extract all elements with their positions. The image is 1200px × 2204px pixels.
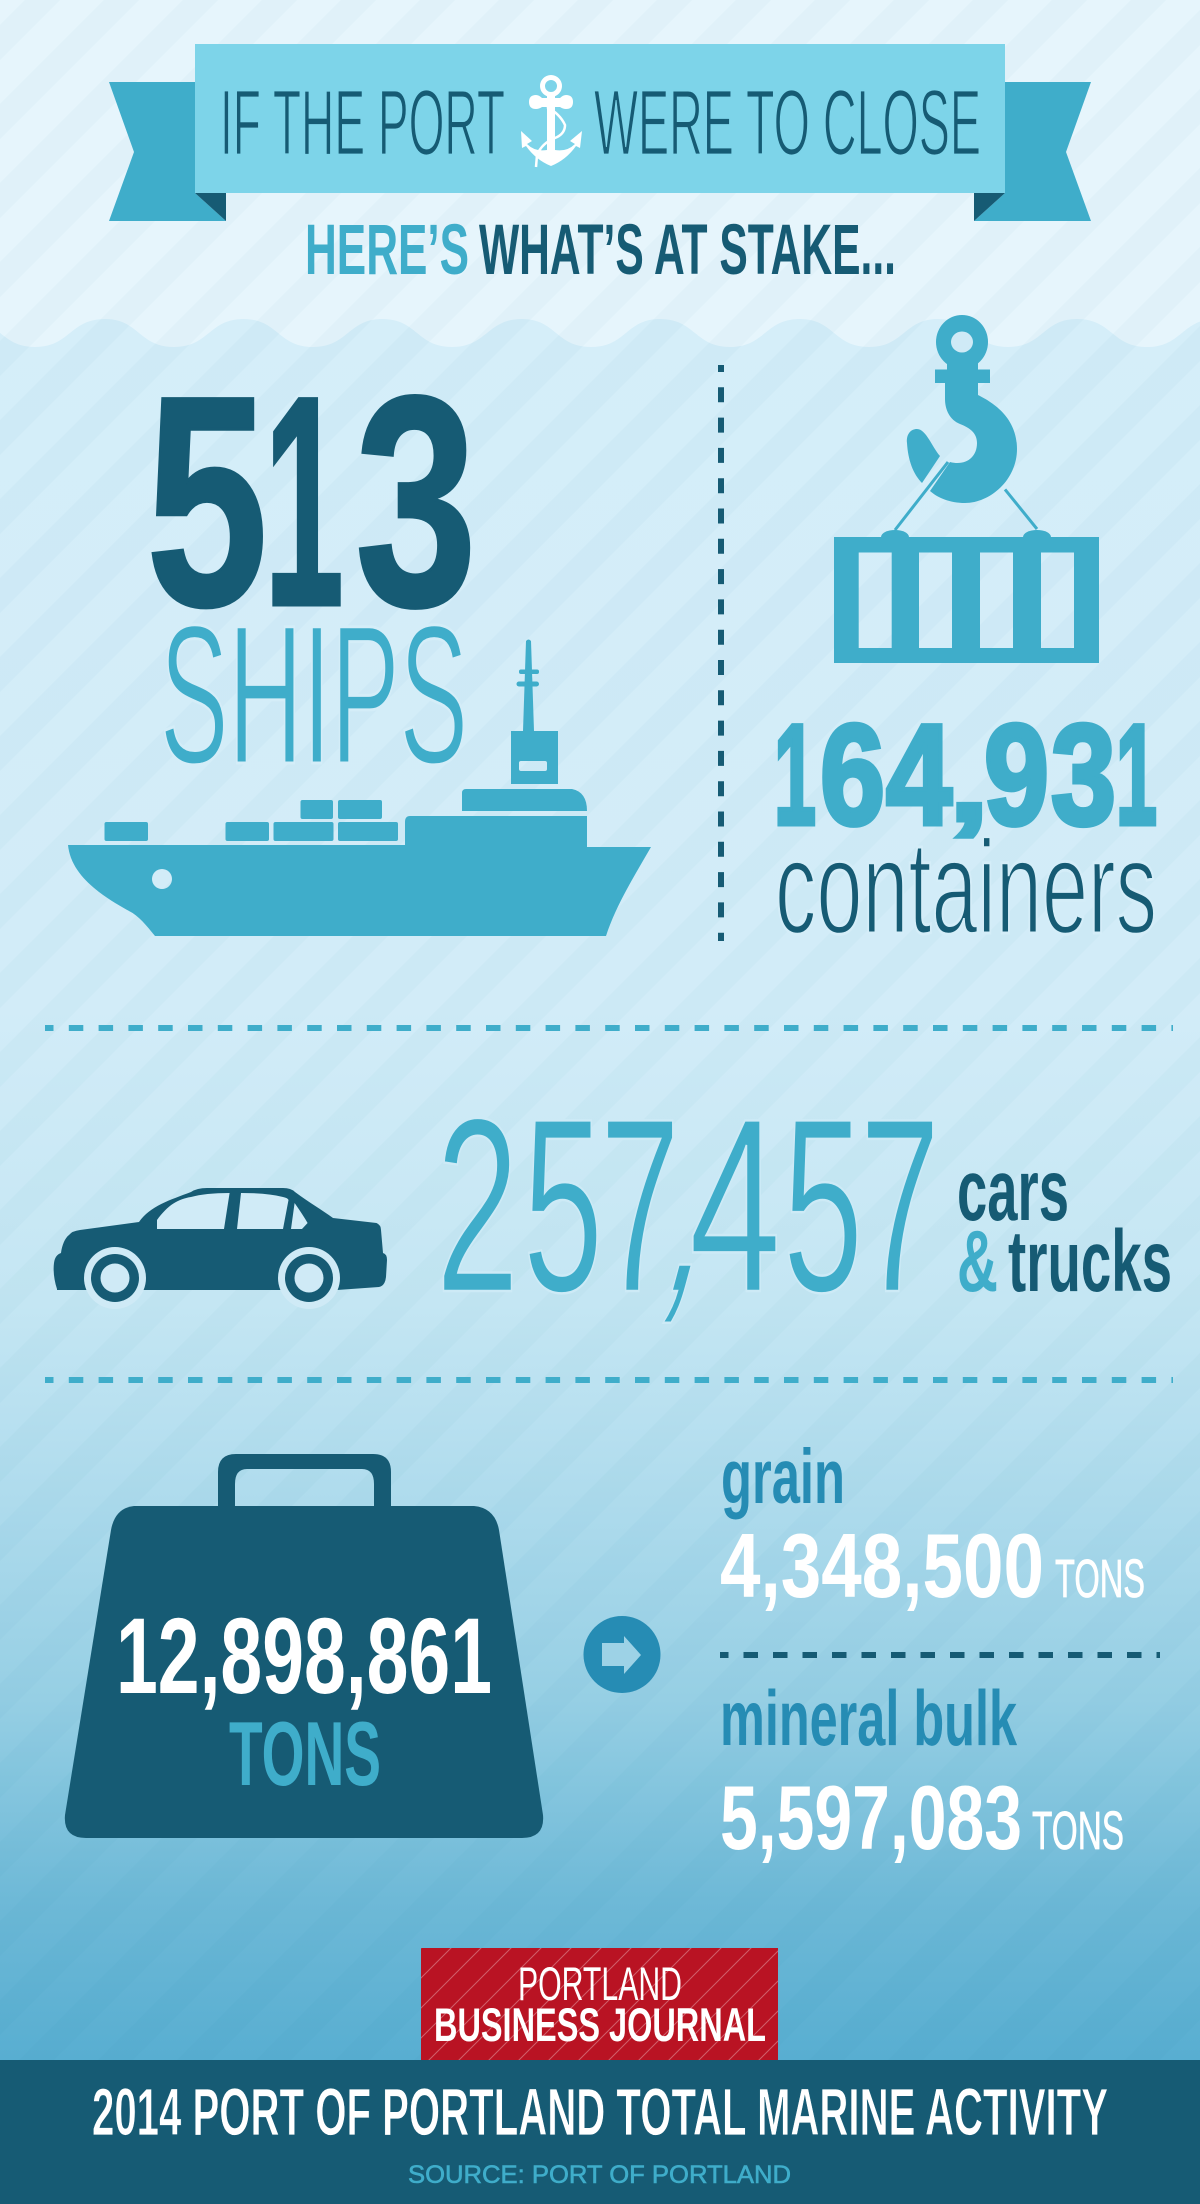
stat: 257,457: 7 xyxy=(600,1066,680,1344)
icon: arrow xyxy=(584,1616,660,1693)
stat: total tons xyxy=(116,1595,492,1805)
label: cars and trucks: cars xyxy=(957,1142,1069,1239)
subtitle: WHAT’S AT STAKE... xyxy=(479,211,896,290)
vertical dashed divider xyxy=(718,365,724,941)
source: SOURCE: PORT OF PORTLAND xyxy=(408,2161,791,2189)
label: cars and trucks: & xyxy=(957,1213,998,1310)
horizontal dashed divider xyxy=(45,1377,1173,1383)
logo: Portland Business Journal: PORTLAND xyxy=(518,1957,682,2010)
stat: grain xyxy=(720,1434,1145,1617)
number 164,931: 1 xyxy=(774,696,816,855)
stat: 164,931 containers xyxy=(774,696,1157,962)
logo: Portland Business Journal: BUSINESS JOURNAL xyxy=(434,1998,766,2051)
number 513: 3 xyxy=(355,333,477,669)
logo: Portland Business Journal xyxy=(421,1948,778,2060)
stat: 257,457: , xyxy=(646,1067,756,1344)
stat: 257,457: 5 xyxy=(523,1066,603,1344)
icon: weight xyxy=(65,1454,543,1838)
grain tons: 4,348,500 xyxy=(720,1516,1044,1617)
number 164,931: , xyxy=(950,726,988,843)
icon: container ship xyxy=(68,640,651,936)
grain unit: TONS xyxy=(1055,1549,1145,1609)
number 12,898,861: 12,898,861 xyxy=(116,1595,492,1716)
label grain: grain xyxy=(721,1434,845,1520)
number 164,931: 4 xyxy=(886,696,952,855)
mineral tons: 5,597,083 xyxy=(720,1768,1022,1869)
label tons: TONS xyxy=(229,1704,381,1805)
ribbon left fold xyxy=(195,193,226,221)
number 164,931 xyxy=(774,696,1157,855)
subtitle xyxy=(305,211,896,290)
banner ribbon xyxy=(109,44,1091,221)
ribbon right tail xyxy=(974,82,1091,221)
icon: anchor xyxy=(521,75,582,167)
subtitle: HERE’S xyxy=(305,211,469,290)
number 164,931: 1 xyxy=(1116,696,1157,855)
horizontal dashed divider xyxy=(45,1025,1173,1031)
ribbon main panel xyxy=(195,44,1005,193)
stat: 257,457: 7 xyxy=(860,1066,940,1344)
number 513 xyxy=(146,333,477,669)
infographic: IF THE PORT xyxy=(220,70,505,174)
stat: mineral bulk xyxy=(720,1674,1124,1869)
icon: car xyxy=(54,1188,387,1309)
icon: crane hook with container xyxy=(834,315,1099,663)
number 513: 5 xyxy=(146,333,268,669)
label mineral bulk: mineral bulk xyxy=(720,1674,1017,1762)
stat: 257,457 xyxy=(436,1066,940,1344)
stat: 257,457: 4 xyxy=(689,1066,781,1344)
ribbon right fold xyxy=(974,193,1005,221)
number 513: 1 xyxy=(264,333,344,669)
mineral unit: TONS xyxy=(1032,1801,1124,1861)
stat: 257,457: 5 xyxy=(783,1066,863,1344)
label ships: SHIPS xyxy=(160,584,468,805)
ribbon left tail xyxy=(109,82,226,221)
stat: 513 ships xyxy=(146,333,477,805)
number 164,931: 9 xyxy=(984,696,1049,855)
number 164,931: 3 xyxy=(1051,696,1116,855)
dashed divider xyxy=(720,1652,1160,1658)
stat: 257,457: 2 xyxy=(436,1066,519,1344)
label: cars and trucks xyxy=(957,1142,1172,1310)
number 164,931: 6 xyxy=(820,696,885,855)
footer band xyxy=(0,2060,1200,2204)
